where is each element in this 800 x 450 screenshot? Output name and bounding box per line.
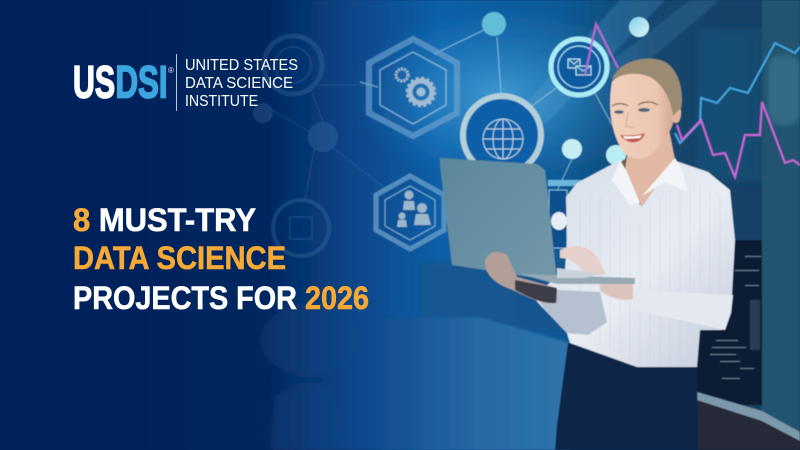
woman — [533, 59, 735, 450]
title: DATA SCIENCE — [73, 240, 286, 276]
ponytail — [584, 155, 632, 207]
face — [610, 73, 678, 159]
nose — [626, 112, 634, 128]
laptop lid — [440, 158, 557, 281]
line chart: pink — [677, 102, 800, 177]
network connecting lines — [360, 30, 616, 200]
icon: globe ring — [463, 96, 541, 174]
eyes — [614, 108, 650, 114]
institute name — [185, 57, 298, 110]
faded seated figure — [260, 305, 360, 450]
icon: people hexagon — [376, 176, 444, 249]
logo wordmark: USDSI: DSI — [116, 56, 168, 108]
title: PROJECTS FOR 2026 — [73, 280, 369, 316]
icons: glowing nodes — [482, 12, 649, 165]
title — [73, 202, 369, 316]
right window and city lights — [697, 0, 800, 450]
institute name: INSTITUTE — [185, 93, 258, 110]
eyebrows — [612, 102, 658, 106]
collar — [612, 158, 688, 205]
icon: cloud panel — [548, 180, 598, 248]
laptop base — [520, 268, 635, 284]
trousers — [555, 343, 698, 450]
faded left network icons — [253, 36, 385, 256]
shirt stripes — [580, 185, 720, 365]
icon: mail ring — [551, 39, 607, 95]
registered mark: ® — [168, 66, 174, 75]
hair — [612, 59, 682, 116]
rolled sleeve — [536, 290, 607, 335]
logo — [73, 54, 298, 111]
icon: gears hexagon — [369, 39, 457, 136]
hands — [485, 246, 633, 303]
title: 8 MUST-TRY — [73, 202, 256, 238]
shirt — [533, 160, 735, 367]
logo wordmark: USDSI: US — [73, 56, 115, 108]
neck — [625, 125, 675, 207]
institute name: UNITED STATES — [185, 57, 298, 74]
ear — [671, 103, 681, 123]
line chart: purple — [585, 24, 618, 75]
institute name: DATA SCIENCE — [185, 75, 293, 92]
logo divider — [176, 54, 177, 111]
line chart: blue — [675, 43, 800, 143]
mouth — [620, 133, 645, 142]
